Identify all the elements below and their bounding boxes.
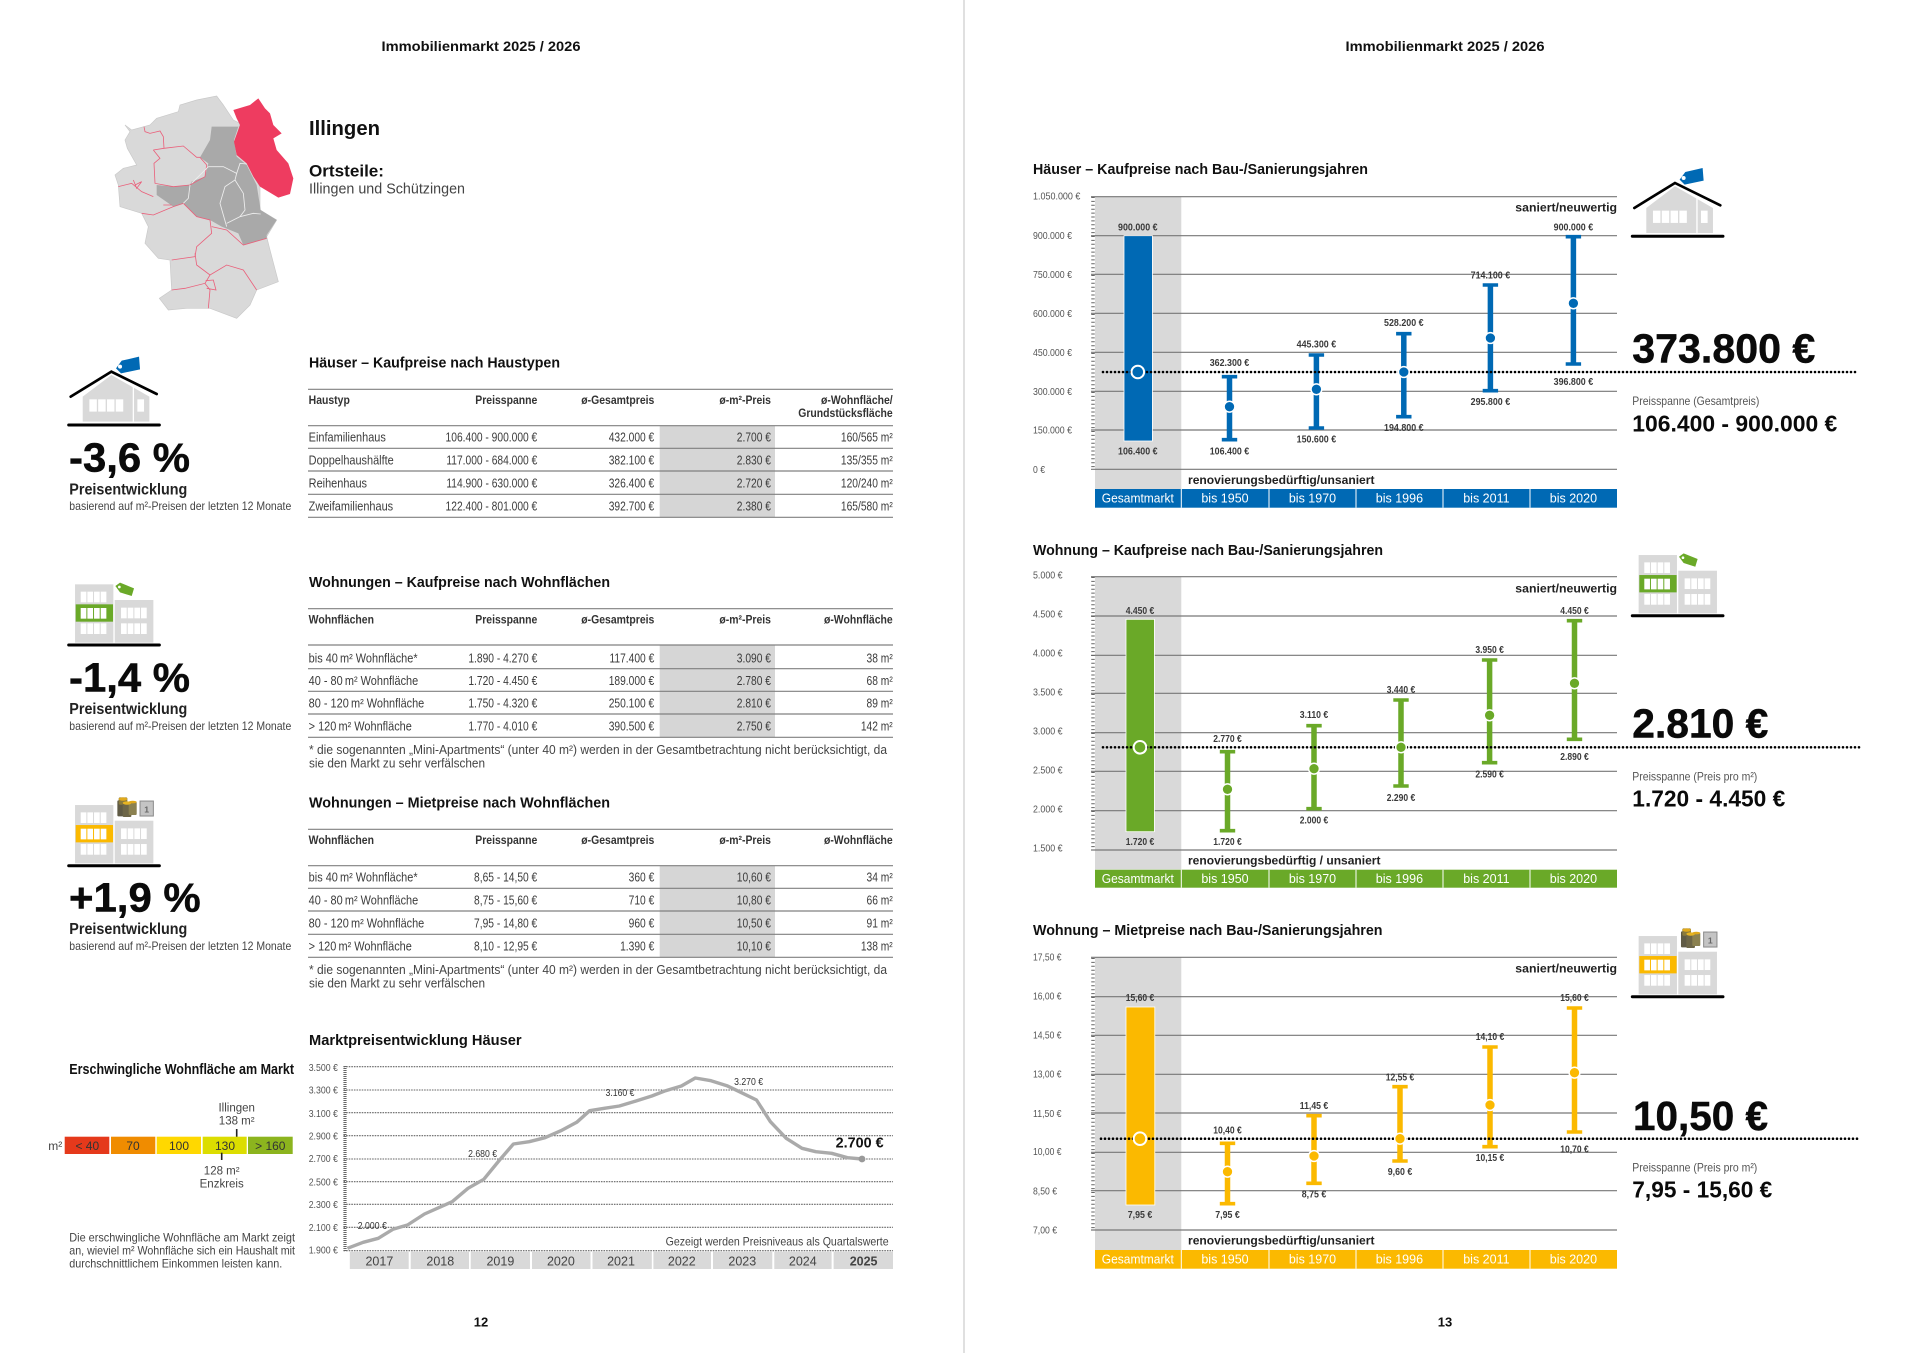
value labels: 9,60 € bbox=[1388, 1167, 1413, 1178]
header row: Preisspanne bbox=[475, 394, 537, 407]
row labels: > 120 m² Wohnfläche bbox=[309, 720, 412, 734]
marker Enzkreis: 128 m² bbox=[204, 1165, 240, 1177]
icon: apartment yellow bbox=[69, 797, 159, 866]
value labels: 10,70 € bbox=[1560, 1144, 1589, 1156]
panel: Erschwingliche Wohnfläche bbox=[48, 1061, 296, 1270]
row labels: 80 - 120 m² Wohnfläche bbox=[309, 917, 424, 931]
row values: 91 m² bbox=[867, 918, 893, 931]
y axis labels bbox=[1033, 570, 1063, 854]
summary: Wohnung Kauf bbox=[1632, 700, 1786, 812]
y axis labels: 7,00 € bbox=[1033, 1224, 1057, 1236]
chart: Häuser Kaufpreise bbox=[1033, 161, 1858, 508]
y axis labels: 450.000 € bbox=[1033, 347, 1072, 359]
y axis labels: 3.500 € bbox=[1033, 686, 1063, 698]
marker Illingen bbox=[218, 1103, 255, 1137]
Ortsteile list: Illingen und Schützingen bbox=[309, 180, 465, 197]
row labels: 80 - 120 m² Wohnfläche bbox=[309, 697, 424, 710]
value labels: 10,40 € bbox=[1213, 1126, 1242, 1136]
row labels bbox=[309, 431, 394, 514]
Ortsteile: Ortsteile: bbox=[309, 163, 384, 181]
footnote bbox=[309, 963, 887, 990]
table title: Häuser – Kaufpreise nach Haustypen bbox=[309, 355, 560, 372]
note: renovierungsbedürftig: renovierungsbedürftig/unsaniert bbox=[1188, 1233, 1374, 1247]
value labels: 3.160 € bbox=[606, 1087, 635, 1099]
value labels: 714.100 € bbox=[1471, 270, 1511, 281]
summary: Wohnung Kauf: 2.810 € bbox=[1632, 700, 1768, 746]
y axis labels: 14,50 € bbox=[1033, 1030, 1062, 1042]
row values: 8,10 - 12,95 € bbox=[474, 941, 538, 954]
bars bbox=[1126, 619, 1582, 832]
category band: bis 1950 bbox=[1201, 491, 1249, 505]
range label: Preisspanne (Gesamtpreis) bbox=[1632, 394, 1759, 408]
explanation text bbox=[69, 1231, 296, 1270]
summary: Wohnung Miete bbox=[1632, 1093, 1772, 1202]
value labels: 2.000 € bbox=[1300, 816, 1329, 826]
header row: Grundstücksfläche bbox=[798, 407, 893, 420]
row values: 1.720 - 4.450 € bbox=[468, 675, 538, 688]
value labels: 2.680 € bbox=[468, 1148, 497, 1160]
header row: ø-Gesamtpreis bbox=[581, 834, 654, 847]
heading: Illingen: Illingen bbox=[309, 118, 380, 140]
range label: Preisspanne (Preis pro m²) bbox=[1632, 770, 1757, 784]
header row: ø-Gesamtpreis bbox=[581, 614, 654, 627]
y axis labels: 8,50 € bbox=[1033, 1186, 1057, 1198]
value labels: 14,10 € bbox=[1476, 1032, 1505, 1043]
value labels: 3.950 € bbox=[1475, 645, 1504, 656]
KPI label: Preisentwicklung bbox=[69, 701, 187, 718]
KPI note: basierend auf m²-Preisen der letzten 12 Monate bbox=[69, 939, 292, 953]
category band: bis 1996 bbox=[1376, 1252, 1423, 1266]
category band: bis 1996 bbox=[1376, 872, 1423, 886]
footnote: sie den Markt zu sehr verfälschen bbox=[309, 976, 485, 990]
value labels: 396.800 € bbox=[1554, 377, 1594, 388]
row values: 10,50 € bbox=[737, 918, 772, 931]
header row: Preisspanne bbox=[475, 834, 537, 847]
y axis labels: 17,50 € bbox=[1033, 952, 1062, 964]
y axis labels: 5.000 € bbox=[1033, 570, 1063, 582]
value labels: 11,45 € bbox=[1300, 1101, 1329, 1112]
row values: 68 m² bbox=[867, 675, 893, 688]
average dotted line bbox=[1101, 1137, 1859, 1140]
row values: 326.400 € bbox=[609, 478, 655, 491]
row values: 165/580 m² bbox=[841, 501, 893, 514]
line chart: Marktpreisentwicklung Häuser bbox=[309, 1032, 893, 1269]
row values: 1.770 - 4.010 € bbox=[468, 721, 538, 734]
row labels: Doppelhaushälfte bbox=[309, 454, 394, 467]
row values: 135/355 m² bbox=[841, 454, 893, 468]
row labels bbox=[309, 871, 424, 954]
explanation text: Die erschwingliche Wohnfläche am Markt zeigt bbox=[69, 1231, 296, 1245]
y axis labels bbox=[1033, 952, 1062, 1236]
colour scale: 70 bbox=[126, 1139, 140, 1153]
value labels: 900.000 € bbox=[1118, 222, 1158, 233]
KPI label: Preisentwicklung bbox=[69, 481, 187, 498]
row values bbox=[446, 432, 893, 514]
colour scale: 100 bbox=[169, 1139, 189, 1153]
category band: bis 2011 bbox=[1463, 491, 1510, 505]
value labels: 2.290 € bbox=[1387, 793, 1416, 804]
value labels: 4.450 € bbox=[1126, 606, 1155, 617]
category band: Gesamtmarkt bbox=[1102, 1252, 1174, 1266]
colour scale: 130 bbox=[215, 1139, 235, 1153]
y axis labels: 150.000 € bbox=[1033, 424, 1072, 436]
category band: bis 2011 bbox=[1463, 872, 1510, 886]
chart title: Häuser – Kaufpreise nach Bau-/Sanierungsjahren bbox=[1033, 161, 1368, 178]
page number left: 12 bbox=[474, 1314, 488, 1330]
category band: bis 2020 bbox=[1550, 1252, 1597, 1266]
year axis: 2017 bbox=[365, 1255, 393, 1269]
note: saniert: saniert/neuwertig bbox=[1515, 582, 1617, 596]
row values: 250.100 € bbox=[609, 697, 655, 711]
table title: Wohnungen – Kaufpreise nach Wohnflächen bbox=[309, 574, 610, 591]
row values: 8,65 - 14,50 € bbox=[474, 872, 538, 885]
value labels: 2.590 € bbox=[1475, 770, 1504, 780]
header right: Immobilienmarkt 2025 / 2026 bbox=[1346, 38, 1545, 54]
row labels bbox=[309, 652, 424, 734]
y axis labels: 0 € bbox=[1033, 464, 1045, 476]
value labels: 106.400 € bbox=[1210, 447, 1250, 458]
y axis labels: 2.700 € bbox=[309, 1153, 338, 1165]
KPI value: -3,6 % bbox=[69, 435, 190, 481]
footnote: * die sogenannten „Mini-Apartments“ (unter 40 m²) werden in der Gesamtbetrachtung nicht berücksichtigt, da bbox=[309, 743, 887, 757]
map: Enzkreis with Illingen highlighted bbox=[115, 96, 293, 318]
y axis labels: 2.100 € bbox=[309, 1222, 338, 1234]
category band: bis 1996 bbox=[1376, 491, 1423, 505]
row values: 10,10 € bbox=[737, 941, 772, 954]
marker Enzkreis: Enzkreis bbox=[200, 1179, 244, 1191]
note: saniert: saniert/neuwertig bbox=[1515, 962, 1617, 976]
header row: Preisspanne bbox=[475, 614, 537, 627]
table: Wohnungen Mietpreise bbox=[308, 794, 893, 990]
scale unit: m² bbox=[48, 1139, 62, 1153]
icon: house bbox=[69, 357, 159, 425]
row values bbox=[468, 652, 893, 734]
markers bbox=[1132, 298, 1579, 412]
row values: 392.700 € bbox=[609, 501, 655, 514]
row values: 10,80 € bbox=[737, 894, 772, 908]
panel title: Erschwingliche Wohnfläche am Markt bbox=[69, 1061, 294, 1078]
row labels: Reihenhaus bbox=[309, 477, 367, 491]
row values: 189.000 € bbox=[609, 675, 655, 688]
colour scale: > 160 bbox=[255, 1139, 286, 1153]
value labels: 2.890 € bbox=[1560, 752, 1589, 763]
header row: ø-m²-Preis bbox=[719, 394, 771, 407]
KPI panel: Häuser bbox=[69, 357, 292, 513]
category band: bis 1950 bbox=[1201, 872, 1249, 886]
row values: 66 m² bbox=[867, 894, 893, 908]
y axis labels: 2.500 € bbox=[309, 1176, 338, 1188]
y axis labels: 2.000 € bbox=[1033, 804, 1063, 816]
bars bbox=[1126, 1007, 1582, 1205]
chart title: Marktpreisentwicklung Häuser bbox=[309, 1032, 522, 1049]
y axis labels: 13,00 € bbox=[1033, 1068, 1062, 1080]
value labels: 106.400 € bbox=[1118, 447, 1158, 458]
year axis: 2024 bbox=[789, 1255, 817, 1269]
value labels: 150.600 € bbox=[1297, 435, 1337, 446]
row labels: 40 - 80 m² Wohnfläche bbox=[309, 674, 418, 688]
header left: Immobilienmarkt 2025 / 2026 bbox=[382, 38, 581, 54]
table title: Wohnungen – Mietpreise nach Wohnflächen bbox=[309, 794, 610, 812]
category band: bis 2011 bbox=[1463, 1252, 1510, 1266]
category band: bis 1970 bbox=[1289, 491, 1336, 505]
value labels: 7,95 € bbox=[1215, 1210, 1240, 1221]
y axis labels: 1.500 € bbox=[1033, 842, 1063, 854]
y axis labels: 3.300 € bbox=[309, 1084, 338, 1096]
summary: Wohnung Miete: 10,50 € bbox=[1633, 1093, 1768, 1139]
row values: 1.750 - 4.320 € bbox=[468, 697, 538, 711]
category band: bis 1970 bbox=[1289, 872, 1336, 886]
row values: 2.750 € bbox=[737, 721, 772, 734]
row values: 38 m² bbox=[867, 652, 893, 666]
value labels: 2.000 € bbox=[358, 1220, 387, 1232]
value labels bbox=[1118, 222, 1594, 458]
y axis labels: 600.000 € bbox=[1033, 308, 1072, 320]
table: Häuser Kaufpreise bbox=[308, 355, 894, 517]
y axis labels: 2.500 € bbox=[1033, 764, 1063, 776]
row values: 122.400 - 801.000 € bbox=[446, 501, 538, 514]
footnote bbox=[309, 743, 887, 770]
value labels: 15,60 € bbox=[1126, 993, 1155, 1004]
summary: Häuser bbox=[1632, 326, 1838, 437]
value labels: 8,75 € bbox=[1302, 1190, 1327, 1200]
row values: 3.090 € bbox=[737, 652, 772, 666]
value labels: 445.300 € bbox=[1297, 340, 1337, 351]
range value: 1.720 - 4.450 € bbox=[1632, 786, 1786, 812]
value labels bbox=[358, 1076, 763, 1232]
value labels: 2.770 € bbox=[1213, 734, 1242, 745]
icon: apartment yellow right bbox=[1632, 928, 1723, 997]
row values: 106.400 - 900.000 € bbox=[446, 432, 538, 445]
KPI value: +1,9 % bbox=[69, 875, 201, 921]
row values: 34 m² bbox=[867, 872, 893, 885]
row values: 7,95 - 14,80 € bbox=[474, 918, 538, 931]
price curve bbox=[347, 1078, 865, 1248]
row values: 2.830 € bbox=[737, 454, 772, 468]
y axis labels: 900.000 € bbox=[1033, 230, 1072, 242]
header row: ø-Wohnfläche bbox=[824, 834, 893, 847]
header row: ø-m²-Preis bbox=[719, 614, 771, 627]
y axis labels: 3.500 € bbox=[309, 1062, 338, 1074]
row values: 2.380 € bbox=[737, 501, 772, 514]
value labels: 3.110 € bbox=[1300, 710, 1329, 721]
value labels bbox=[1126, 606, 1589, 848]
value labels: 3.270 € bbox=[734, 1076, 763, 1088]
header row: ø-m²-Preis bbox=[719, 834, 771, 847]
KPI note: basierend auf m²-Preisen der letzten 12 Monate bbox=[69, 499, 292, 513]
icon: apartment green right bbox=[1632, 553, 1723, 616]
row values: 1.890 - 4.270 € bbox=[468, 652, 538, 666]
range value: 106.400 - 900.000 € bbox=[1632, 411, 1838, 437]
range value: 7,95 - 15,60 € bbox=[1632, 1176, 1772, 1202]
value labels: 194.800 € bbox=[1384, 423, 1424, 434]
page number right: 13 bbox=[1438, 1314, 1452, 1330]
year axis: 2025 bbox=[850, 1255, 878, 1269]
category band: bis 2020 bbox=[1550, 491, 1597, 505]
row values: 382.100 € bbox=[609, 454, 655, 468]
value labels: 4.450 € bbox=[1560, 606, 1589, 617]
row values: 960 € bbox=[629, 918, 655, 931]
range label: Preisspanne (Preis pro m²) bbox=[1632, 1161, 1757, 1175]
category band: Gesamtmarkt bbox=[1102, 491, 1174, 505]
y axis labels: 4.000 € bbox=[1033, 648, 1063, 660]
value labels: 15,60 € bbox=[1560, 993, 1589, 1004]
value labels: 10,15 € bbox=[1476, 1153, 1505, 1164]
y axis labels: 10,00 € bbox=[1033, 1146, 1062, 1158]
value labels: 362.300 € bbox=[1210, 358, 1250, 369]
value labels: 1.720 € bbox=[1126, 837, 1155, 848]
row values: 10,60 € bbox=[737, 872, 772, 885]
header row bbox=[309, 834, 893, 847]
footnote: * die sogenannten „Mini-Apartments“ (unter 40 m²) werden in der Gesamtbetrachtung nicht berücksichtigt, da bbox=[309, 963, 887, 977]
KPI panel: Wohnungen Kauf bbox=[69, 583, 292, 733]
marker Enzkreis bbox=[200, 1153, 244, 1191]
y axis labels: 16,00 € bbox=[1033, 990, 1062, 1002]
KPI panel: Wohnungen Miete bbox=[69, 797, 292, 953]
row values: 142 m² bbox=[861, 721, 893, 734]
colour scale: < 40 bbox=[75, 1139, 99, 1153]
y axis labels bbox=[309, 1062, 338, 1256]
table: Wohnungen Kaufpreise bbox=[308, 574, 893, 770]
category band: bis 1970 bbox=[1289, 1252, 1336, 1266]
category band: Gesamtmarkt bbox=[1102, 872, 1174, 886]
row values: 138 m² bbox=[861, 941, 893, 954]
KPI label: Preisentwicklung bbox=[69, 921, 187, 938]
year axis: 2019 bbox=[486, 1255, 514, 1269]
header row: Wohnflächen bbox=[309, 834, 374, 847]
row values: 1.390 € bbox=[620, 941, 655, 954]
explanation text: durchschnittlichem Einkommen leisten kann. bbox=[69, 1256, 282, 1270]
year axis: 2023 bbox=[728, 1255, 756, 1269]
average dotted line bbox=[1103, 746, 1860, 749]
year axis bbox=[350, 1252, 893, 1269]
y axis labels: 750.000 € bbox=[1033, 269, 1072, 281]
footnote: sie den Markt zu sehr verfälschen bbox=[309, 756, 485, 770]
average dotted line bbox=[1103, 371, 1858, 373]
row values: 710 € bbox=[629, 894, 655, 908]
header row: Wohnflächen bbox=[309, 614, 374, 627]
row labels: Zweifamilienhaus bbox=[309, 500, 393, 514]
row labels: 40 - 80 m² Wohnfläche bbox=[309, 894, 418, 907]
header row: ø-Wohnfläche bbox=[824, 614, 893, 627]
bars bbox=[1124, 236, 1581, 441]
year axis: 2021 bbox=[607, 1255, 635, 1269]
note: renovierungsbedürftig: renovierungsbedürftig / unsaniert bbox=[1188, 853, 1380, 867]
y axis labels: 2.300 € bbox=[309, 1199, 338, 1211]
row values: 160/565 m² bbox=[841, 432, 893, 445]
category band bbox=[1095, 489, 1617, 508]
y axis labels: 3.100 € bbox=[309, 1108, 338, 1120]
y axis labels: 300.000 € bbox=[1033, 386, 1072, 398]
row values: 2.720 € bbox=[737, 478, 772, 491]
row values: 89 m² bbox=[867, 697, 893, 711]
explanation text: an, wieviel m² Wohnfläche sich ein Haushalt mit bbox=[69, 1244, 296, 1258]
chart: Wohnung Mietpreise bbox=[1033, 922, 1859, 1269]
row labels: > 120 m² Wohnfläche bbox=[309, 940, 412, 954]
value labels: 7,95 € bbox=[1128, 1210, 1153, 1221]
y axis labels: 3.000 € bbox=[1033, 726, 1063, 738]
colour scale bbox=[65, 1137, 293, 1154]
heading: Illingen bbox=[309, 118, 465, 197]
row labels: bis 40 m² Wohnfläche* bbox=[309, 871, 418, 885]
header row: Haustyp bbox=[309, 394, 350, 407]
markers bbox=[1134, 1067, 1580, 1177]
category band: bis 2020 bbox=[1550, 872, 1597, 886]
y axis labels: 11,50 € bbox=[1033, 1108, 1062, 1120]
y axis labels: 2.900 € bbox=[309, 1130, 338, 1142]
row values: 2.810 € bbox=[737, 697, 772, 711]
year axis: 2020 bbox=[547, 1255, 575, 1269]
chart title: Wohnung – Mietpreise nach Bau-/Sanierungsjahren bbox=[1033, 922, 1382, 939]
row values: 2.780 € bbox=[737, 675, 772, 688]
note: saniert: saniert/neuwertig bbox=[1515, 201, 1617, 215]
row values: 114.900 - 630.000 € bbox=[446, 478, 538, 491]
row values: 8,75 - 15,60 € bbox=[474, 894, 538, 908]
value labels bbox=[1126, 993, 1589, 1221]
category band bbox=[1095, 1250, 1617, 1269]
value labels: 1.720 € bbox=[1213, 837, 1242, 848]
row labels: bis 40 m² Wohnfläche* bbox=[309, 652, 418, 665]
markers bbox=[1134, 678, 1580, 795]
marker Illingen: Illingen bbox=[218, 1103, 255, 1115]
row labels: Einfamilienhaus bbox=[309, 431, 386, 445]
value labels: 12,55 € bbox=[1386, 1072, 1415, 1084]
header row: ø-Gesamtpreis bbox=[581, 394, 654, 407]
year axis: 2022 bbox=[668, 1255, 696, 1269]
row values: 360 € bbox=[629, 872, 655, 885]
row values: 432.000 € bbox=[609, 432, 655, 445]
page divider bbox=[963, 0, 965, 1353]
value labels: 295.800 € bbox=[1471, 397, 1511, 408]
note: renovierungsbedürftig: renovierungsbedürftig/unsaniert bbox=[1188, 473, 1374, 487]
value labels: 900.000 € bbox=[1554, 222, 1594, 233]
chart: Wohnung Kaufpreise bbox=[1033, 542, 1860, 888]
row values bbox=[474, 872, 893, 954]
current value: 2.700 € bbox=[836, 1136, 884, 1152]
y axis labels: 1.050.000 € bbox=[1033, 190, 1081, 202]
KPI value: -1,4 % bbox=[69, 655, 190, 701]
row values: 2.700 € bbox=[737, 432, 772, 445]
year axis: 2018 bbox=[426, 1255, 454, 1269]
category band bbox=[1095, 870, 1617, 888]
row values: 117.000 - 684.000 € bbox=[446, 454, 538, 468]
KPI note: basierend auf m²-Preisen der letzten 12 Monate bbox=[69, 719, 292, 733]
marker Illingen: 138 m² bbox=[219, 1115, 255, 1127]
row values: 117.400 € bbox=[609, 652, 655, 666]
category band: bis 1950 bbox=[1201, 1252, 1249, 1266]
row values: 390.500 € bbox=[609, 721, 655, 734]
icon: house right bbox=[1632, 168, 1723, 236]
icon: apartment green bbox=[69, 583, 159, 645]
header row bbox=[309, 614, 893, 627]
y axis labels: 4.500 € bbox=[1033, 608, 1063, 620]
value labels: 3.440 € bbox=[1387, 685, 1416, 696]
y axis labels bbox=[1033, 190, 1081, 476]
row values: 120/240 m² bbox=[841, 478, 893, 491]
value labels: 528.200 € bbox=[1384, 318, 1424, 329]
y axis labels: 1.900 € bbox=[309, 1244, 338, 1256]
header row: ø-Wohnfläche/ bbox=[821, 394, 894, 407]
chart note: Gezeigt werden Preisniveaus als Quartalswerte bbox=[666, 1235, 889, 1249]
header row bbox=[309, 394, 894, 420]
summary: Häuser: 373.800 € bbox=[1632, 326, 1815, 372]
chart title: Wohnung – Kaufpreise nach Bau-/Sanierungsjahren bbox=[1033, 542, 1383, 559]
